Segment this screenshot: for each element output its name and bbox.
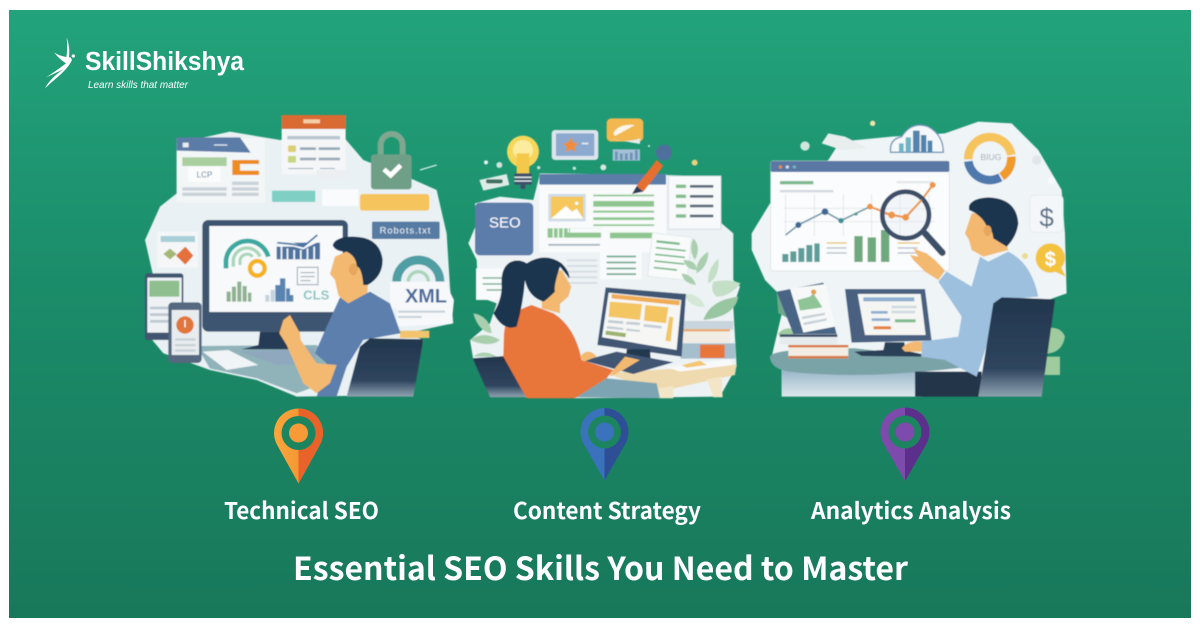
icon: cloud chart	[890, 125, 943, 152]
label: Robots.txt	[372, 222, 440, 239]
small bar charts	[227, 278, 293, 302]
illustration: analytics analysis	[752, 121, 1067, 397]
XML card	[390, 260, 454, 338]
floating dots	[484, 145, 698, 170]
floating notes	[600, 233, 691, 280]
desk	[770, 348, 965, 397]
card: checklist	[282, 115, 346, 178]
icon: orange map pin	[274, 408, 323, 484]
$ card: $	[1039, 203, 1054, 233]
label: Analytics Analysis: Analytics Analysis	[810, 492, 1011, 526]
monitor	[202, 220, 348, 349]
coin	[1036, 243, 1066, 277]
card: LCP	[177, 137, 265, 202]
icon: pencil	[632, 145, 672, 194]
label: Content Strategy: Content Strategy	[513, 492, 701, 526]
label: Technical SEO: Technical SEO	[224, 492, 379, 526]
person: man at monitor	[279, 237, 423, 397]
plants	[777, 290, 1065, 375]
gauge chart	[226, 241, 268, 276]
pill bars	[272, 189, 429, 211]
card: star rating	[552, 130, 598, 160]
person: woman typing	[473, 257, 660, 398]
card: side list	[668, 176, 721, 229]
gray text block	[567, 259, 597, 284]
stacked books	[681, 321, 736, 359]
floating dots	[800, 121, 1056, 259]
brand name: SkillShikshya	[85, 48, 245, 76]
devices: tablet and phone	[145, 273, 202, 363]
card: diamonds	[157, 232, 198, 268]
bar chart: teal	[782, 243, 820, 262]
dashboard window	[771, 161, 949, 271]
plants	[470, 238, 741, 357]
label: CLS: CLS	[303, 288, 329, 302]
document icon	[297, 267, 318, 285]
icon: blue map pin	[580, 408, 628, 480]
donut chart	[968, 137, 1011, 180]
backdrop blob	[752, 122, 1067, 395]
main title: Essential SEO Skills You Need to Master	[293, 544, 908, 590]
XML card: XML	[405, 286, 447, 307]
icon: light bulb	[507, 136, 539, 189]
tagline: Learn skills that matter	[88, 79, 188, 91]
bar chart: green	[854, 230, 889, 262]
illustration: content strategy	[468, 118, 741, 398]
small note	[476, 268, 506, 300]
donut chart: BIUG	[980, 152, 1002, 162]
speech bubble	[607, 118, 643, 161]
SEO tile: SEO	[489, 215, 521, 231]
backdrop blob	[145, 132, 453, 397]
bar and trend chart	[277, 233, 320, 259]
laptop monitor	[583, 287, 686, 374]
icon: link badge	[479, 174, 509, 191]
coin: $	[1045, 249, 1056, 271]
icon: leaping figure	[45, 37, 75, 88]
illustration: technical SEO	[145, 115, 454, 397]
icon: purple map pin	[881, 407, 929, 481]
line chart	[783, 182, 936, 236]
backdrop blob	[468, 173, 740, 398]
card: LCP: LCP	[197, 169, 213, 179]
icon: padlock	[371, 134, 437, 189]
label: Robots.txt: Robots.txt	[380, 226, 431, 236]
books and tablet	[777, 283, 848, 358]
text lines	[548, 195, 654, 238]
monitor	[845, 289, 932, 357]
$ card	[1030, 195, 1063, 233]
image placeholder	[548, 194, 586, 221]
icon: magnifying glass	[882, 192, 942, 253]
desk	[197, 345, 343, 393]
keyboard and paper	[203, 348, 317, 370]
SEO tile	[475, 203, 533, 255]
logo: SkillShikshya	[45, 37, 245, 91]
person: analyst	[902, 197, 1055, 397]
browser page	[539, 174, 666, 252]
desk	[607, 359, 737, 398]
